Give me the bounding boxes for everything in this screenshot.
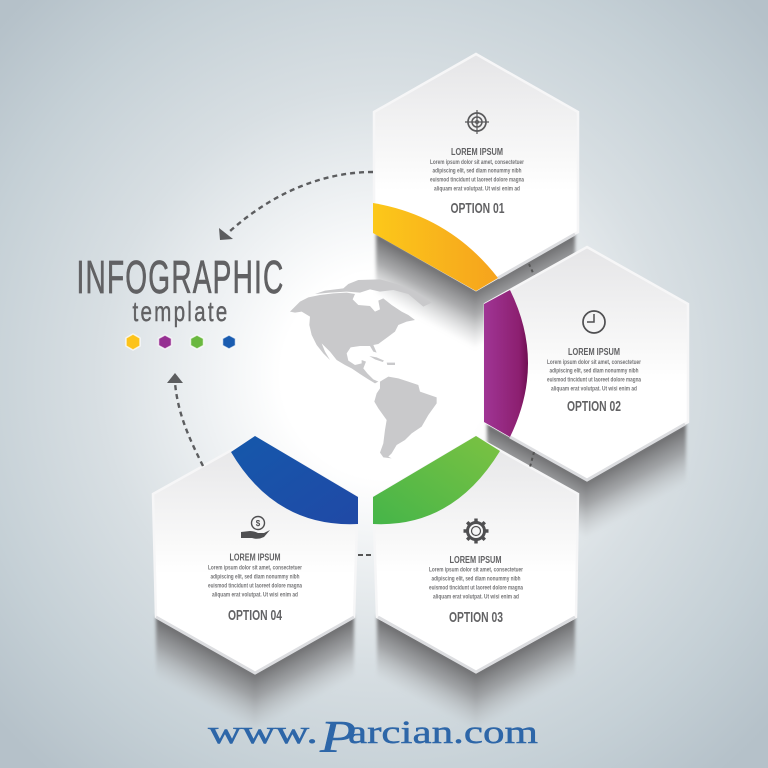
segment: green band xyxy=(373,436,500,524)
text block: body 3 xyxy=(429,566,523,600)
text block: body 4: Lorem ipsum dolor sit amet, consectetuer xyxy=(208,564,302,572)
text block: body 2: aliquam erat volutpat. Ut wisi enim ad xyxy=(551,386,637,392)
text block: body 2 xyxy=(547,359,641,392)
connector: hexagon 2 to 3 xyxy=(530,452,534,467)
icon: world map xyxy=(290,279,437,458)
panel: hexagon 3 xyxy=(373,436,578,672)
website url: www. xyxy=(208,715,318,751)
website url: P xyxy=(319,711,356,762)
icon: hand with coin: $ xyxy=(256,519,261,528)
label: option 01: OPTION 01 xyxy=(450,200,504,217)
shadow: hexagon 4 xyxy=(156,616,354,734)
segment: yellow band xyxy=(373,203,498,291)
panel: hexagon 2 xyxy=(484,247,688,480)
text block: body 3: Lorem ipsum dolor sit amet, consectetuer xyxy=(429,566,523,574)
website url xyxy=(208,711,538,762)
label: option 02: OPTION 02 xyxy=(567,398,621,415)
icon: gear xyxy=(464,518,488,544)
text block: body 1: adipiscing elit, sed diam nonummy nibh xyxy=(432,168,522,174)
shadow: hexagon 1 xyxy=(376,233,575,351)
text block: body 3: adipiscing elit, sed diam nonummy nibh xyxy=(432,576,521,582)
legend: coloured hexagon dots xyxy=(126,334,236,350)
text block: body 1: Lorem ipsum dolor sit amet, consectetuer xyxy=(430,159,524,166)
text block: body 3: aliquam erat volutpat. Ut wisi enim ad xyxy=(433,594,519,600)
shadow: hexagon 2 xyxy=(487,423,686,541)
website url: arcian.com xyxy=(348,715,538,751)
icon: target xyxy=(465,110,489,134)
text block: body 2: adipiscing elit, sed diam nonummy nibh xyxy=(550,368,639,374)
text block: body 2: euismod tincidunt ut laoreet dolore magna xyxy=(547,376,641,384)
text block: body 4: adipiscing elit, sed diam nonummy nibh xyxy=(210,574,300,580)
text block: body 3: euismod tincidunt ut laoreet dolore magna xyxy=(429,584,523,592)
text block: body 1: aliquam erat volutpat. Ut wisi enim ad xyxy=(434,186,520,192)
icon: clock xyxy=(583,311,605,333)
heading: lorem ipsum 1: LOREM IPSUM xyxy=(451,146,503,158)
label: option 04: OPTION 04 xyxy=(228,607,282,624)
heading: lorem ipsum 3: LOREM IPSUM xyxy=(450,554,502,566)
subtitle: template xyxy=(132,296,230,327)
arrow: bottom curve to title xyxy=(167,373,203,466)
arrow: top curve to title xyxy=(219,172,373,240)
shadow: hexagon 3 xyxy=(377,616,575,733)
connector: hexagon 3 to 4 xyxy=(358,554,373,556)
text block: body 4: aliquam erat volutpat. Ut wisi enim ad xyxy=(212,592,298,598)
title: INFOGRAPHIC xyxy=(76,251,284,303)
text block: body 4: euismod tincidunt ut laoreet dolore magna xyxy=(208,582,302,590)
text block: body 4 xyxy=(208,564,302,598)
text block: body 1 xyxy=(430,159,524,192)
text block: body 2: Lorem ipsum dolor sit amet, consectetuer xyxy=(547,359,641,366)
text block: body 1: euismod tincidunt ut laoreet dolore magna xyxy=(430,176,524,184)
heading: lorem ipsum 4: LOREM IPSUM xyxy=(230,552,281,564)
connector: hexagon 1 to 2 xyxy=(529,264,534,275)
heading: lorem ipsum 2: LOREM IPSUM xyxy=(568,346,620,358)
segment: blue band xyxy=(231,436,358,524)
panel: hexagon 4 xyxy=(153,436,358,673)
segment: purple band xyxy=(484,290,528,437)
panel: hexagon 1 xyxy=(373,54,578,291)
label: option 03: OPTION 03 xyxy=(449,609,503,626)
icon: hand with coin xyxy=(241,516,270,539)
